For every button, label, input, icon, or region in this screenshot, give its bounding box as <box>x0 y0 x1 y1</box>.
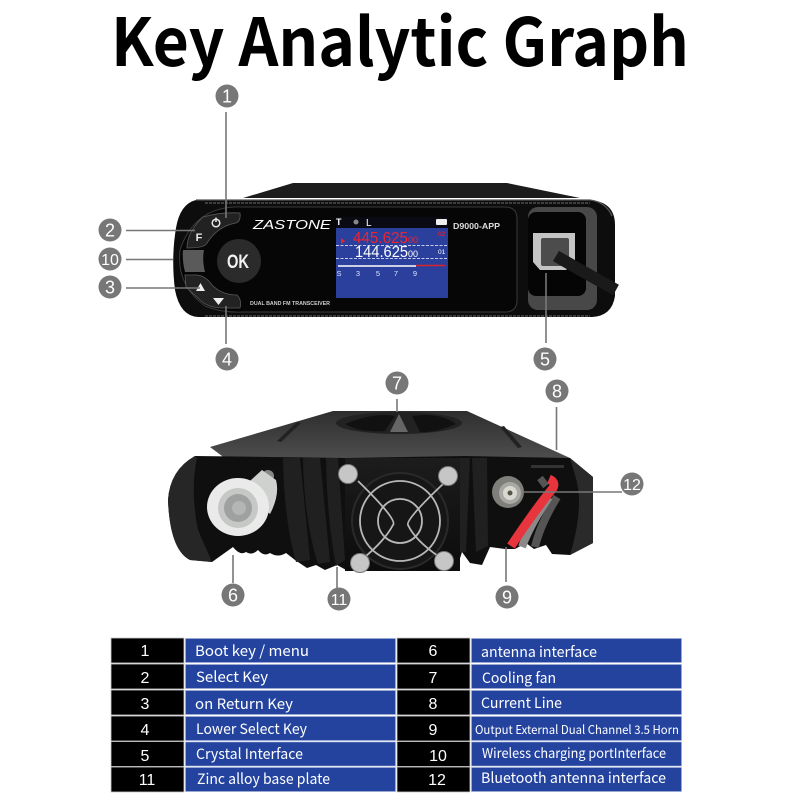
row 1 <box>141 640 309 661</box>
callout markers: 6 <box>228 586 238 606</box>
heat fins <box>283 458 488 566</box>
top surface <box>210 411 570 462</box>
row 3: on Return Key <box>195 693 293 714</box>
LCD screen: 00 <box>408 249 418 259</box>
row 10: Wireless charging portInterface <box>482 742 666 762</box>
callout markers: 11 <box>331 592 347 609</box>
row 7: Cooling fan <box>482 667 556 688</box>
row 4: 4 <box>141 722 150 739</box>
row 1: 1 <box>141 643 150 660</box>
power slot <box>531 465 564 468</box>
LCD screen <box>336 217 448 298</box>
radio rear view <box>168 411 593 572</box>
row 10 <box>429 742 666 765</box>
screws <box>338 464 458 572</box>
callout markers: 12 <box>623 477 641 494</box>
row 2: Select Key <box>196 666 268 687</box>
callout markers <box>98 84 644 610</box>
LCD screen: 9 <box>413 269 417 278</box>
OK button: OK <box>227 252 249 273</box>
row 8: 8 <box>429 696 438 713</box>
icon: power glyph <box>212 218 220 227</box>
callout markers: 5 <box>540 350 550 370</box>
row 5 <box>141 743 303 765</box>
fan vent <box>336 412 462 434</box>
row 3: 3 <box>141 696 150 713</box>
table cells <box>111 638 682 792</box>
inner panel <box>180 207 517 312</box>
row 6: antenna interface <box>481 641 597 662</box>
front body <box>173 200 615 317</box>
antenna interface <box>207 470 277 536</box>
callout markers: 1 <box>222 86 232 106</box>
callout lines <box>126 112 622 588</box>
rear housing <box>243 183 580 198</box>
LCD screen: T <box>336 217 342 227</box>
callout markers: 7 <box>392 374 402 394</box>
row 11: Zinc alloy base plate <box>197 768 330 789</box>
left end cap <box>168 456 212 562</box>
icon: up arrow <box>196 283 205 291</box>
parts table <box>111 638 682 792</box>
row 5: 5 <box>141 748 150 765</box>
button: up and down <box>185 275 241 308</box>
LCD screen: 7 <box>394 269 398 278</box>
top grooves <box>277 422 522 448</box>
callout markers: 4 <box>222 350 232 370</box>
row 8: Current Line <box>481 692 562 713</box>
row 4: Lower Select Key <box>196 718 307 739</box>
row 11 <box>139 768 330 789</box>
row 12: 12 <box>428 772 446 789</box>
row 2 <box>141 666 268 687</box>
wires <box>511 478 557 547</box>
callout markers: 3 <box>105 278 115 298</box>
speaker mesh <box>183 250 205 272</box>
callout markers: 2 <box>105 220 115 240</box>
row 5: Crystal Interface <box>196 743 303 764</box>
LCD screen: 02 <box>438 231 446 238</box>
OK button <box>217 239 261 283</box>
BNC connector <box>492 476 524 508</box>
LCD screen: 01 <box>438 249 446 256</box>
row 6 <box>429 641 597 662</box>
callout markers: 8 <box>552 382 562 402</box>
rear face <box>168 456 593 571</box>
row 4 <box>141 718 307 739</box>
LCD screen: L <box>366 218 372 229</box>
brand: ZASTONE <box>252 217 331 232</box>
row 11: 11 <box>139 772 155 789</box>
row 12: Bluetooth antenna interface <box>481 767 666 788</box>
right end cap <box>570 458 593 555</box>
icon: down arrow <box>213 298 224 305</box>
row 9: 9 <box>429 722 438 739</box>
crystal interface <box>528 207 616 310</box>
radio front view <box>173 183 616 317</box>
row 7: 7 <box>429 670 438 687</box>
row 10: 10 <box>429 748 447 765</box>
callout markers: 10 <box>101 252 119 269</box>
row 1: Boot key / menu <box>195 640 309 661</box>
row 8 <box>429 692 562 713</box>
row 3 <box>141 693 293 714</box>
row 2: 2 <box>141 670 150 687</box>
LCD screen: S <box>336 269 342 278</box>
callout markers: 9 <box>502 588 512 608</box>
LCD screen: 5 <box>376 269 380 278</box>
cooling fan <box>338 458 460 572</box>
button label: F: F <box>196 232 203 244</box>
button: power and F <box>187 213 240 248</box>
LCD screen: 445.625 <box>353 230 408 247</box>
row 7 <box>429 667 556 688</box>
model: D9000-APP <box>453 221 500 231</box>
row 6: 6 <box>429 643 438 660</box>
LCD screen: 00 <box>408 235 418 245</box>
row 9: Output External Dual Channel 3.5 Horn <box>475 721 679 738</box>
LCD screen: 3 <box>356 269 360 278</box>
LCD screen: 144.625 <box>355 244 408 261</box>
caption: DUAL BAND FM TRANSCEIVER <box>250 301 330 307</box>
